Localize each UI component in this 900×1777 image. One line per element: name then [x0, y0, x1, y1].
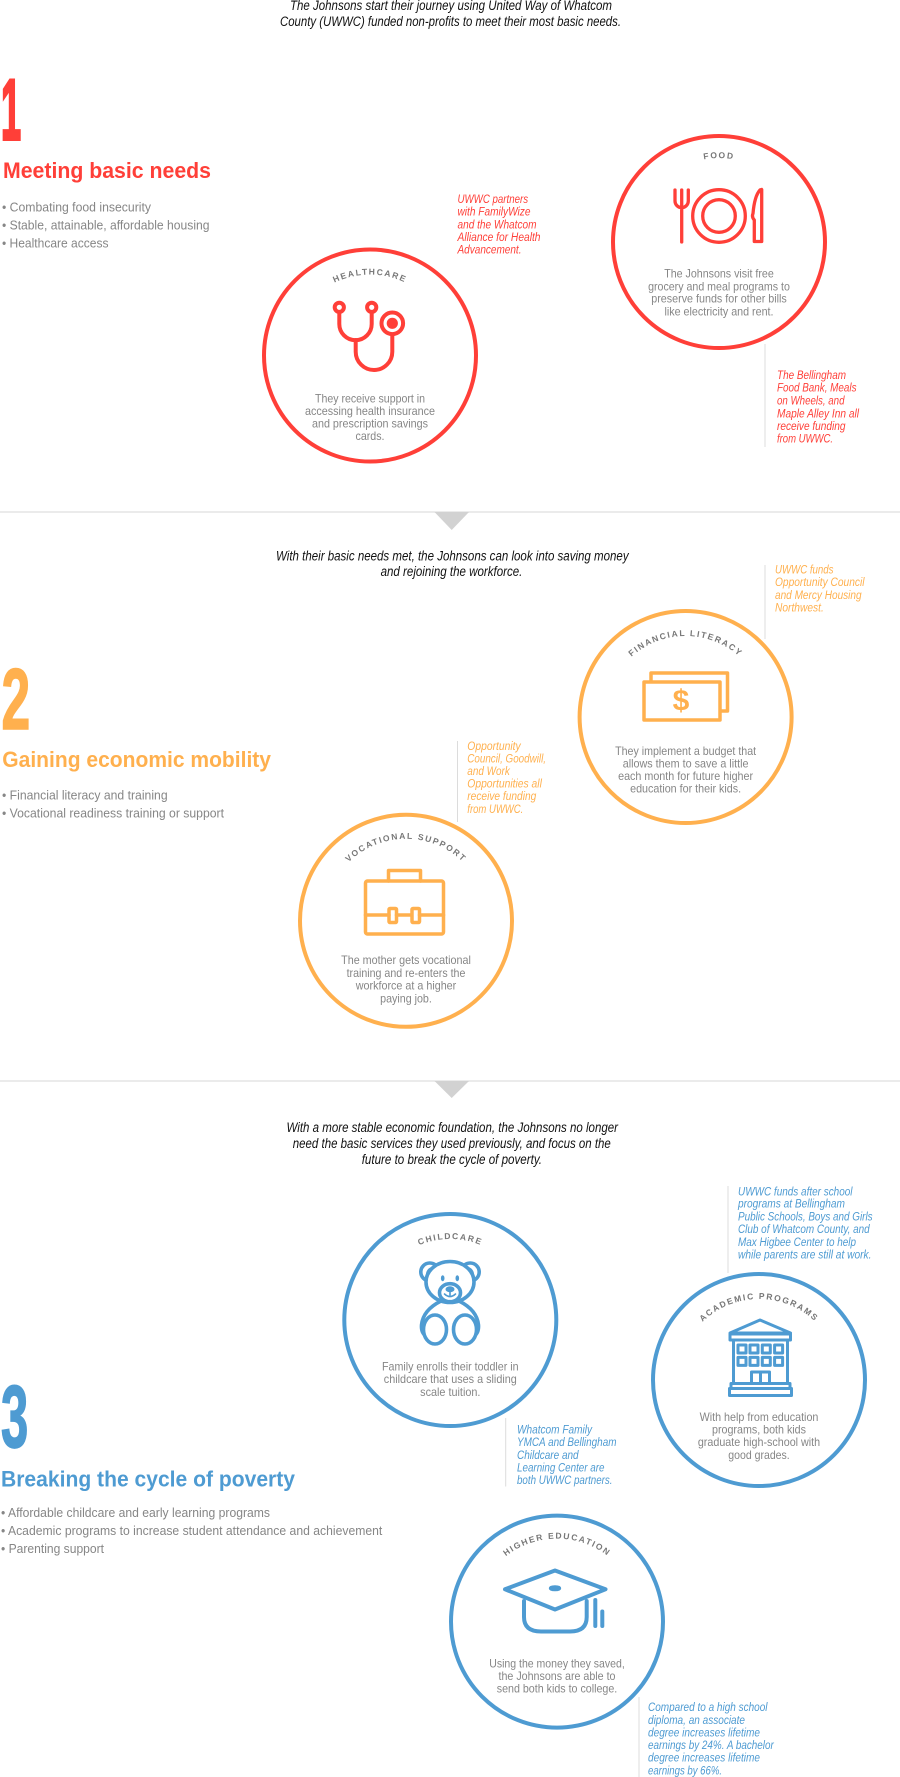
text: academic programs: programs, both kids: [712, 1422, 806, 1436]
note: vocational partners: receive funding: [467, 791, 537, 803]
list: section 2 needs: • Vocational readiness training or support: [2, 806, 224, 820]
note: higher education earnings: diploma, an associate: [648, 1715, 745, 1727]
text: childcare: childcare that uses a sliding: [384, 1372, 517, 1386]
text: food: grocery and meal programs to: [648, 279, 790, 293]
note: higher education earnings: earnings by 66%.: [648, 1765, 722, 1777]
panel: academic programs: [651, 1272, 867, 1488]
note: vocational partners: and Work: [467, 766, 511, 778]
text: academic programs: [698, 1410, 820, 1462]
list: section 3 needs: [1, 1505, 383, 1556]
divider arrow 2: [0, 1080, 900, 1098]
icon: briefcase: [366, 870, 444, 934]
label: childcare: CHILDCARE: [418, 1233, 482, 1245]
note: healthcare partners: and the Whatcom: [458, 219, 537, 231]
text: healthcare: and prescription savings: [312, 416, 428, 430]
section 2 intro text: and rejoining the workforce.: [381, 564, 522, 579]
text: vocational support: workforce at a higher: [355, 978, 456, 992]
note: food partners: The Bellingham: [777, 370, 846, 382]
text: healthcare: [305, 391, 435, 443]
note: food partners: Maple Alley Inn all: [777, 408, 859, 420]
text: higher education: Using the money they saved,: [489, 1657, 625, 1671]
note: childcare partners: [506, 1418, 617, 1487]
note: financial literacy partners: Opportunity Council: [775, 577, 865, 589]
text: academic programs: With help from education: [700, 1410, 818, 1424]
note: vocational partners: Council, Goodwill,: [467, 754, 546, 766]
panel: healthcare: [262, 248, 478, 464]
note: higher education earnings: earnings by 24%. A bachelor: [648, 1740, 775, 1752]
text: childcare: [382, 1359, 519, 1399]
text: higher education: [489, 1657, 625, 1696]
heading: meeting basic needs: Meeting basic needs: [3, 158, 211, 183]
list: section 3 needs: • Academic programs to increase student attendance and achievement: [1, 1523, 383, 1538]
panel: vocational support: [298, 812, 514, 1029]
text: childcare: Family enrolls their toddler in: [382, 1359, 519, 1373]
text: vocational support: The mother gets vocational: [341, 953, 471, 967]
list: section 1 needs: • Combating food insecurity: [2, 200, 151, 214]
text: food: [648, 266, 790, 318]
note: food partners: from UWWC.: [777, 433, 833, 445]
text: academic programs: good grades.: [728, 1448, 790, 1462]
note: healthcare partners: Alliance for Health: [457, 232, 540, 244]
number 1: 1: [1, 61, 21, 158]
text: food: like electricity and rent.: [664, 304, 774, 318]
note: academic partners: programs at Bellingham: [737, 1199, 845, 1211]
text: higher education: send both kids to college.: [497, 1682, 617, 1696]
note: childcare partners: both UWWC partners.: [517, 1475, 612, 1487]
icon: fork, plate and knife: [675, 190, 762, 242]
note: higher education earnings: Compared to a high school: [648, 1702, 768, 1714]
panel: childcare: [342, 1212, 558, 1428]
note: healthcare partners: Advancement.: [457, 244, 522, 256]
section 3 intro text: future to break the cycle of poverty.: [362, 1152, 542, 1167]
text: healthcare: accessing health insurance: [305, 404, 435, 418]
text: financial literacy: allows them to save a little: [623, 757, 749, 771]
note: higher education earnings: degree increases lifetime: [648, 1728, 760, 1740]
ring: academic programs: [653, 1274, 865, 1486]
icon: banknotes: $: [673, 684, 690, 718]
note: healthcare partners: with FamilyWize: [458, 207, 530, 219]
note: academic partners: Max Higbee Center to help: [738, 1237, 857, 1249]
note: vocational partners: [458, 741, 546, 822]
note: vocational partners: from UWWC.: [467, 804, 523, 816]
note: financial literacy partners: and Mercy Housing: [775, 590, 862, 602]
label: academic programs: ACADEMIC PROGRAMS: [700, 1293, 818, 1322]
list: section 2 needs: • Financial literacy and training: [2, 788, 168, 802]
note: academic partners: Public Schools, Boys and Girls: [738, 1211, 873, 1223]
note: childcare partners: Learning Center are: [517, 1463, 604, 1475]
icon: teddy bear: [421, 1262, 479, 1344]
list: section 1 needs: [2, 200, 210, 250]
ring: higher education: [451, 1516, 663, 1728]
text: financial literacy: education for their kids.: [630, 782, 741, 796]
text: financial literacy: [615, 744, 757, 796]
list: section 1 needs: • Healthcare access: [2, 236, 109, 250]
icon: school building: [730, 1320, 792, 1396]
text: vocational support: paying job.: [380, 992, 432, 1006]
note: vocational partners: Opportunity: [467, 741, 522, 753]
section 2 intro text: With their basic needs met, the Johnsons can look into saving money: [276, 548, 630, 564]
text: childcare: scale tuition.: [420, 1385, 480, 1399]
note: financial literacy partners: [765, 564, 865, 639]
section 3 intro text: [286, 1120, 618, 1167]
panel: higher education: [449, 1514, 665, 1730]
note: healthcare partners: UWWC partners: [458, 194, 528, 206]
text: vocational support: training and re-enters the: [347, 966, 466, 980]
section 3 intro text: need the basic services they used previously, and focus on the: [293, 1136, 611, 1151]
text: vocational support: [341, 953, 471, 1006]
list: section 2 needs: [2, 788, 224, 820]
ring: financial literacy: [580, 611, 792, 823]
divider arrow 1: [0, 511, 900, 530]
number 2: 2: [2, 653, 30, 748]
note: financial literacy partners: Northwest.: [775, 603, 824, 615]
ring: healthcare: [264, 250, 476, 462]
note: financial literacy partners: UWWC funds: [775, 564, 834, 576]
text: healthcare: cards.: [356, 429, 384, 443]
note: academic partners: [728, 1186, 873, 1273]
text: academic programs: graduate high-school with: [698, 1435, 820, 1449]
icon: graduation cap: [505, 1570, 606, 1632]
note: higher education earnings: degree increases lifetime: [648, 1752, 760, 1764]
note: food partners: receive funding: [777, 421, 846, 433]
text: food: preserve funds for other bills: [651, 292, 787, 306]
text: financial literacy: They implement a budget that: [615, 744, 757, 758]
panel: food: [611, 134, 827, 350]
heading: gaining economic mobility: Gaining economic mobility: [2, 747, 272, 772]
label: healthcare: HEALTHCARE: [332, 268, 406, 282]
ring: vocational support: [300, 815, 512, 1027]
icon: banknotes: [644, 673, 728, 720]
label: financial literacy: FINANCIAL LITERACY: [628, 630, 742, 656]
label: vocational support: VOCATIONAL SUPPORT: [344, 833, 466, 861]
note: vocational partners: Opportunities all: [467, 778, 542, 790]
note: food partners: [765, 344, 859, 447]
ring: childcare: [344, 1214, 556, 1426]
text: food: The Johnsons visit free: [664, 266, 774, 280]
label: higher education: HIGHER EDUCATION: [502, 1532, 610, 1556]
section 2 intro text: [276, 548, 630, 579]
icon: stethoscope: [335, 303, 403, 370]
note: academic partners: UWWC funds after school: [738, 1186, 853, 1198]
section 1 intro text: County (UWWC) funded non-profits to meet their most basic needs.: [280, 14, 621, 29]
note: food partners: Food Bank, Meals: [777, 383, 857, 395]
ring: food: [613, 136, 825, 348]
text: financial literacy: each month for future higher: [618, 769, 753, 783]
label: food: FOOD: [704, 152, 733, 160]
note: childcare partners: Whatcom Family: [517, 1424, 593, 1436]
section 1 intro text: [280, 0, 621, 29]
note: childcare partners: Childcare and: [517, 1450, 579, 1462]
note: childcare partners: YMCA and Bellingham: [517, 1437, 617, 1449]
number 3: 3: [1, 1368, 28, 1467]
text: higher education: the Johnsons are able to: [498, 1669, 616, 1683]
note: food partners: on Wheels, and: [777, 395, 845, 407]
list: section 3 needs: • Parenting support: [1, 1541, 104, 1556]
text: healthcare: They receive support in: [315, 391, 425, 405]
heading: breaking the cycle of poverty: Breaking the cycle of poverty: [1, 1466, 296, 1492]
note: healthcare partners: [457, 194, 540, 256]
note: academic partners: while parents are still at work.: [738, 1250, 871, 1262]
panel: financial literacy: [578, 609, 794, 825]
note: higher education earnings: [639, 1697, 775, 1777]
section 3 intro text: With a more stable economic foundation, the Johnsons no longer: [286, 1120, 618, 1135]
list: section 3 needs: • Affordable childcare and early learning programs: [1, 1505, 270, 1520]
note: academic partners: Club of Whatcom County, and: [738, 1224, 870, 1236]
list: section 1 needs: • Stable, attainable, affordable housing: [2, 218, 210, 232]
